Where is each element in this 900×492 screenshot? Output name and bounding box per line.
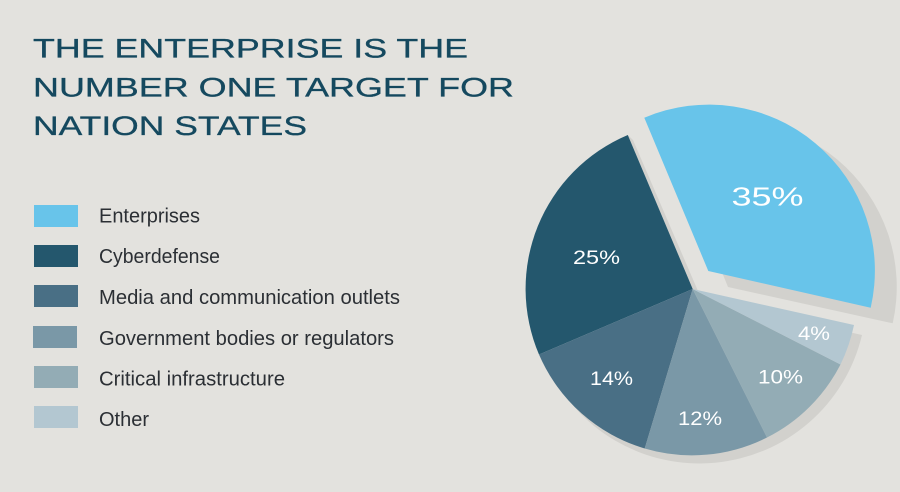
slice: Other 4% [693,289,854,364]
legend [33,204,400,431]
slice: Critical infrastructure 10% [693,289,840,438]
legend item: Critical infrastructure: Critical infrastructure [99,368,285,390]
pie chart [526,105,897,463]
label: 35%: 35% [732,182,804,212]
legend item: Media and communication outlets: Media and communication outlets [99,286,400,309]
legend item: Enterprises [34,204,200,228]
legend item: Other: Other [99,408,149,431]
pie drop shadows [547,121,897,463]
title: NATION STATES [33,111,307,141]
label: 12%: 12% [678,409,722,430]
slice: Enterprises 35% (exploded) [644,105,875,308]
slice: Cyberdefense 25% [526,135,693,354]
title: NUMBER ONE TARGET FOR [33,72,514,102]
legend item: Enterprises: Enterprises [99,204,200,228]
title: THE ENTERPRISE IS THE [33,34,468,64]
slice labels [573,182,830,430]
legend item: Cyberdefense [34,245,220,268]
legend item: Cyberdefense: Cyberdefense [99,245,220,268]
slice: Media and communication outlets 14% [539,289,693,448]
label: 10%: 10% [758,368,803,388]
legend item: Critical infrastructure [34,366,285,390]
label: 14%: 14% [590,369,633,390]
label: 25%: 25% [573,248,620,269]
label: 4%: 4% [798,324,830,345]
legend item: Other [34,406,149,431]
title [33,34,514,141]
legend item: Government bodies or regulators: Government bodies or regulators [99,327,394,350]
slice: Government bodies or regulators 12% [645,289,767,455]
